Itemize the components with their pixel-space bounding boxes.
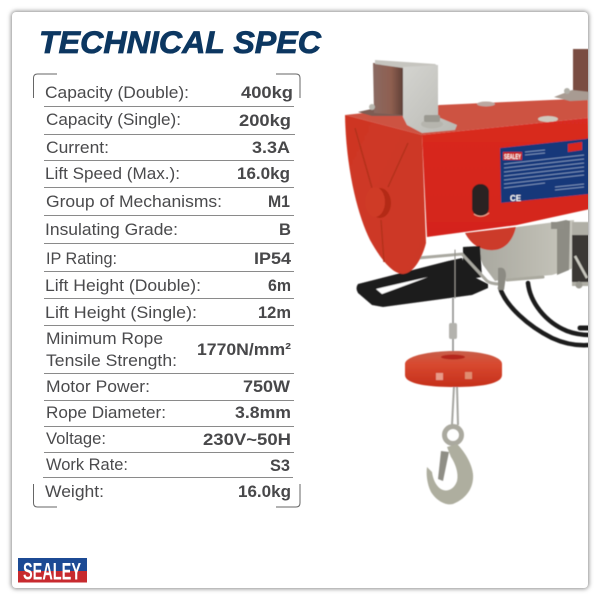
red weight disc (405, 351, 502, 387)
row: insulating grade (45, 220, 291, 239)
Sealey logo (18, 558, 87, 586)
row: lift height double: Lift Height (Double): (45, 276, 201, 295)
row: weight (45, 482, 291, 501)
row: capacity double: 400kg (241, 83, 293, 102)
row: minimum rope tensile strength: Minimum Rope (46, 329, 163, 348)
row: group of mechanisms: Group of Mechanisms: (46, 192, 222, 211)
row: motor power (46, 377, 291, 396)
power cables (500, 283, 590, 345)
row: lift speed: Lift Speed (Max.): (45, 164, 180, 183)
row: motor power: 750W (243, 377, 291, 396)
table frame corners (34, 74, 300, 507)
row: work rate: Work Rate: (46, 455, 128, 474)
row: minimum rope tensile strength: Tensile Strength: (46, 351, 177, 370)
row: capacity double: Capacity (Double): (45, 83, 189, 102)
row separators (43, 106, 295, 478)
label marks: CE (510, 194, 522, 203)
row: minimum rope tensile strength (46, 329, 291, 370)
row: work rate: S3 (270, 456, 290, 475)
row: motor power: Motor Power: (46, 377, 150, 396)
row: capacity single: Capacity (Single): (46, 110, 181, 129)
row: group of mechanisms: M1 (268, 192, 290, 211)
row: voltage: 230V~50H (203, 430, 291, 449)
rating label (500, 138, 590, 203)
motor housing (477, 220, 590, 288)
illustration: electric hoist (345, 49, 590, 504)
row: rope diameter (46, 403, 291, 422)
row: capacity single: 200kg (239, 111, 291, 130)
row: capacity double (45, 83, 293, 102)
row: ip rating (46, 249, 292, 268)
row: current: Current: (46, 138, 109, 157)
row: lift height single (45, 303, 291, 322)
row: lift height double: 6m (268, 276, 291, 295)
bolts on top face (477, 102, 558, 122)
row: insulating grade: Insulating Grade: (45, 220, 178, 239)
row: lift height double (45, 276, 291, 295)
row: lift height single: Lift Height (Single): (45, 303, 197, 322)
red side plate (345, 115, 426, 274)
row: rope diameter: 3.8mm (235, 403, 291, 422)
row: work rate (46, 455, 290, 475)
row: lift height single: 12m (258, 303, 291, 322)
row: voltage: Voltage: (46, 429, 106, 448)
row: insulating grade: B (279, 220, 291, 239)
row: capacity single (46, 110, 291, 130)
title: TECHNICAL SPEC (39, 24, 322, 60)
rope (449, 298, 458, 425)
left mounting bracket (358, 60, 457, 133)
row: lift speed (45, 164, 290, 183)
row: ip rating: IP54 (254, 249, 292, 268)
hook (427, 426, 473, 504)
row: weight: 16.0kg (238, 482, 291, 501)
row: current (46, 138, 290, 157)
Sealey logo: SEALEY (23, 558, 81, 586)
row: weight: Weight: (45, 482, 104, 501)
label logo: SEALEY (504, 154, 521, 161)
row: rope diameter: Rope Diameter: (46, 403, 166, 422)
red drum (465, 227, 516, 250)
slot opening (472, 184, 489, 216)
row: current: 3.3A (252, 138, 290, 157)
pivot bolt (377, 188, 391, 218)
red front face (422, 118, 590, 237)
row: minimum rope tensile strength: 1770N/mm² (197, 340, 291, 359)
black handle (356, 246, 488, 307)
spec table (34, 74, 300, 507)
row: voltage (46, 429, 291, 449)
right mounting bracket (554, 49, 590, 101)
row: ip rating: IP Rating: (46, 249, 117, 268)
row: lift speed: 16.0kg (237, 164, 290, 183)
silver handle rod (418, 250, 543, 298)
top face of body (345, 97, 588, 135)
